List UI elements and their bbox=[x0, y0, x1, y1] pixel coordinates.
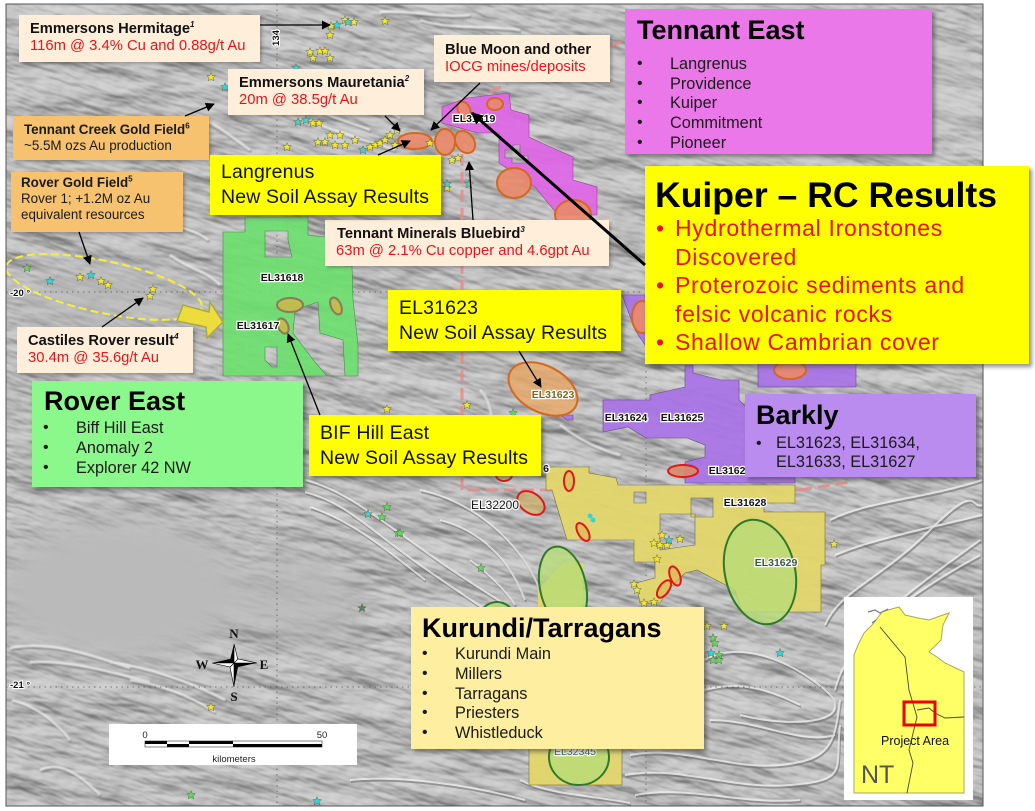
tenement labels: EL31623 bbox=[532, 389, 574, 401]
panel: Barkly: EL31633, EL31627 bbox=[776, 453, 915, 471]
callout: EL31623 soil results: EL31623 bbox=[399, 297, 478, 319]
heading: Kurundi/Tarragans: Kurundi/Tarragans bbox=[422, 613, 662, 643]
inset map: Northern Territory: Project Area bbox=[881, 734, 949, 748]
callout: BIF Hill East soil results: BIF Hill East bbox=[320, 422, 429, 444]
callout: Langrenus soil results: Langrenus bbox=[221, 161, 315, 183]
callout: Emmersons Hermitage: Emmersons Hermitage1 bbox=[30, 20, 194, 37]
panel: Tennant East: Langrenus bbox=[670, 55, 747, 73]
panel: Barkly: EL31623, EL31634, bbox=[776, 434, 920, 452]
big yellow arrow bbox=[177, 302, 223, 338]
callout: BIF Hill East soil results bbox=[309, 415, 541, 476]
heading: Kuiper RC Results: Kuiper – RC Results bbox=[655, 175, 997, 215]
panel: Barkly: • bbox=[756, 435, 762, 452]
tenement labels: EL31629 bbox=[755, 557, 797, 569]
tenement labels: EL32200 bbox=[471, 498, 519, 512]
panel: Tennant East bbox=[625, 9, 932, 154]
panel: Kurundi/Tarragans: • bbox=[422, 665, 428, 682]
callout: Tennant Creek Gold Field: ~5.5M ozs Au production bbox=[24, 138, 172, 153]
results list: Shallow Cambrian cover bbox=[675, 329, 940, 355]
panel: Tennant East: • bbox=[637, 75, 643, 92]
callout: Castiles Rover: Castiles Rover result4 bbox=[28, 332, 179, 349]
panel: Kurundi/Tarragans: Priesters bbox=[455, 704, 519, 722]
scale bar: 0 bbox=[142, 730, 148, 741]
target ellipses: orange bbox=[398, 98, 806, 427]
results list: • bbox=[656, 272, 665, 298]
panel: Tennant East: Commitment bbox=[670, 114, 762, 132]
callout: Blue Moon: IOCG mines/deposits bbox=[445, 59, 586, 75]
results list: • bbox=[656, 329, 665, 355]
callout: Rover Gold Field bbox=[11, 172, 183, 232]
graticule labels: -21 ° bbox=[10, 680, 30, 691]
callout: Tennant Creek Gold Field: Tennant Creek Gold Field6 bbox=[24, 122, 190, 137]
panel: Kurundi/Tarragans: Tarragans bbox=[455, 685, 527, 703]
panel: Tennant East: Pioneer bbox=[670, 134, 726, 152]
tenement labels: EL31627 bbox=[709, 465, 751, 477]
panel: Rover East: • bbox=[43, 439, 49, 456]
scale bar bbox=[109, 724, 357, 765]
panel: Rover East: • bbox=[43, 419, 49, 436]
panel: Kurundi/Tarragans: • bbox=[422, 685, 428, 702]
tenement labels bbox=[237, 113, 797, 758]
compass rose: S bbox=[230, 689, 238, 704]
callout: Castiles Rover: 30.4m @ 35.6g/t Au bbox=[28, 350, 159, 366]
compass rose bbox=[196, 626, 268, 704]
tenement labels: EL31628 bbox=[724, 497, 766, 509]
contour bands bbox=[306, 482, 983, 805]
callout: Tennant Minerals Bluebird bbox=[325, 220, 609, 266]
callout: Rover Gold Field: Rover 1; +1.2M oz Au bbox=[21, 191, 150, 206]
target ellipses: green bbox=[475, 512, 806, 785]
panel: Rover East: Anomaly 2 bbox=[76, 439, 153, 457]
graticule labels: -20 ° bbox=[10, 288, 30, 299]
panel: Rover East: • bbox=[43, 459, 49, 476]
tenement: Tennant East magenta bbox=[442, 93, 597, 215]
results list: • bbox=[656, 215, 665, 241]
callout: Emmersons Mauretania bbox=[228, 69, 424, 115]
tenement: Rover East green bbox=[223, 217, 358, 376]
callout: Tennant Minerals Bluebird: Tennant Minerals Bluebird3 bbox=[337, 225, 525, 242]
callout: Emmersons Mauretania: 20m @ 38.5g/t Au bbox=[239, 92, 358, 108]
other markers bbox=[358, 514, 596, 612]
callout: Rover Gold Field: Rover Gold Field5 bbox=[21, 175, 133, 190]
yellow deposit stars bbox=[76, 16, 838, 711]
callout: Langrenus soil results bbox=[210, 155, 441, 215]
callout: Emmersons Mauretania: Emmersons Mauretania2 bbox=[239, 74, 409, 91]
panel: Tennant East: • bbox=[637, 114, 643, 131]
target ellipses: soil on green bbox=[275, 296, 344, 335]
callout: Blue Moon bbox=[434, 35, 610, 82]
callout: Tennant Minerals Bluebird: 63m @ 2.1% Cu copper and 4.6gpt Au bbox=[336, 243, 590, 259]
callout: EL31623 soil results bbox=[388, 290, 621, 351]
tenement labels: 6 bbox=[543, 463, 549, 475]
heading: Barkly: Barkly bbox=[756, 400, 839, 430]
smooth plains bbox=[0, 30, 1000, 675]
panel: Tennant East: Providence bbox=[670, 75, 751, 93]
callout: Blue Moon: Blue Moon and other bbox=[445, 42, 591, 58]
graticule labels bbox=[10, 29, 282, 691]
panel: Tennant East: Kuiper bbox=[670, 94, 717, 112]
tenement labels: EL31617 bbox=[237, 320, 279, 332]
tenement labels: EL31619 bbox=[453, 113, 495, 125]
panel: Kurundi/Tarragans bbox=[411, 607, 704, 749]
inset map: Northern Territory bbox=[844, 597, 973, 800]
compass rose: N bbox=[229, 626, 239, 641]
panel: Kurundi/Tarragans: Kurundi Main bbox=[455, 645, 551, 663]
callout: EL31623 soil results: New Soil Assay Results bbox=[399, 322, 607, 344]
panel: Tennant East: • bbox=[637, 94, 643, 111]
panel: Tennant East: • bbox=[637, 134, 643, 151]
results list bbox=[656, 215, 965, 355]
panel: Rover East: Biff Hill East bbox=[76, 419, 163, 437]
callout: Castiles Rover bbox=[17, 327, 193, 373]
results list: Proterozoic sediments and bbox=[675, 272, 965, 298]
tenement boundary bbox=[462, 40, 850, 490]
panel: Barkly bbox=[745, 394, 976, 477]
graticule labels: 134 bbox=[271, 29, 282, 46]
panel: Kurundi/Tarragans: • bbox=[422, 645, 428, 662]
Rover dashed ellipse bbox=[6, 253, 203, 321]
panel: Kurundi/Tarragans: • bbox=[422, 704, 428, 721]
callout: BIF Hill East soil results: New Soil Assay Results bbox=[320, 447, 528, 469]
heading: Tennant East: Tennant East bbox=[637, 15, 805, 45]
panel: Kurundi/Tarragans: Millers bbox=[455, 665, 502, 683]
green deposit stars bbox=[23, 264, 723, 799]
scale bar: 50 bbox=[317, 730, 327, 741]
results list: Discovered bbox=[675, 244, 797, 270]
target ellipses: red bbox=[496, 465, 698, 600]
panel: Tennant East: • bbox=[637, 55, 643, 72]
callout: Langrenus soil results: New Soil Assay Results bbox=[221, 186, 429, 208]
panel: Rover East: Explorer 42 NW bbox=[76, 459, 191, 477]
results list: Hydrothermal Ironstones bbox=[675, 215, 943, 241]
results list: felsic volcanic rocks bbox=[675, 300, 893, 326]
callout: Emmersons Hermitage bbox=[19, 15, 260, 62]
panel: Kuiper RC Results bbox=[645, 166, 1029, 364]
panel: Rover East bbox=[32, 381, 303, 487]
callout: Rover Gold Field: equivalent resources bbox=[21, 207, 145, 222]
tenement: Barkly purple bbox=[560, 295, 856, 483]
callout: Tennant Creek Gold Field bbox=[13, 116, 209, 160]
tenement labels: EL31625 bbox=[661, 412, 703, 424]
inset map: Northern Territory: NT bbox=[861, 761, 894, 789]
tenement labels: EL32345 bbox=[554, 746, 596, 758]
compass rose: E bbox=[260, 657, 268, 672]
terrain ridges bbox=[10, 12, 621, 797]
tenement labels: EL31618 bbox=[261, 272, 303, 284]
tenement: Kurundi/Tarragans yellow bbox=[529, 467, 825, 785]
tenement labels: EL31624 bbox=[605, 412, 647, 424]
compass rose: W bbox=[196, 657, 208, 672]
heading: Rover East: Rover East bbox=[44, 386, 185, 416]
cyan deposit stars bbox=[46, 18, 784, 805]
panel: Kurundi/Tarragans: • bbox=[422, 724, 428, 741]
callout: Emmersons Hermitage: 116m @ 3.4% Cu and 0.88g/t Au bbox=[30, 38, 245, 54]
panel: Kurundi/Tarragans: Whistleduck bbox=[455, 724, 543, 742]
scale bar: kilometers bbox=[212, 754, 256, 765]
